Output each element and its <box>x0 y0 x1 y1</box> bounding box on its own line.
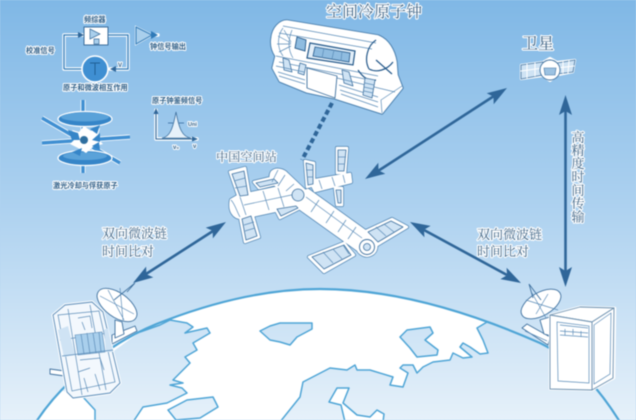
amplifier <box>136 27 152 44</box>
left ground station <box>50 282 143 398</box>
left building <box>53 302 120 398</box>
diagram: servo loop: 钟信号输出 <box>150 42 186 51</box>
atom microwave circle <box>82 56 108 82</box>
diagram: clock signal graph: Uni <box>188 122 197 128</box>
space station <box>230 148 407 272</box>
pump <box>295 37 306 51</box>
label: satellite: 卫星 <box>522 35 554 53</box>
right ocean <box>280 322 620 420</box>
diagram: clock signal graph <box>152 96 202 151</box>
end fan <box>277 28 293 58</box>
diagram: clock signal graph: ν <box>193 144 197 150</box>
diagram: servo loop: V <box>118 63 122 69</box>
satellite <box>521 58 575 81</box>
vacuum window <box>307 43 355 65</box>
arrow: satellite to right ground <box>559 95 572 287</box>
trapping arrows <box>68 125 100 156</box>
earth <box>36 289 620 420</box>
right dish <box>516 283 566 325</box>
server cabinet <box>550 307 615 390</box>
right cap curves <box>358 40 393 80</box>
arrow: station to left ground <box>133 222 226 283</box>
upper and right module lines <box>272 170 345 191</box>
left module lines <box>231 188 296 217</box>
panel grid lines <box>234 157 394 263</box>
dashed link <box>302 103 332 160</box>
label: space station: 中国空间站 <box>216 149 277 164</box>
body <box>540 60 560 80</box>
diagram: laser cooling <box>42 100 130 190</box>
ladder <box>363 78 375 98</box>
label: right microwave link: 双向微波链 <box>477 227 542 242</box>
clock silhouette <box>272 21 402 113</box>
laser label: 激光冷却与俘获原子 <box>53 181 118 190</box>
center block <box>307 68 337 98</box>
arrow: station to right ground <box>410 222 521 283</box>
laser beams <box>42 100 130 173</box>
loop labels: 频综器 <box>84 15 106 24</box>
bottom coil <box>58 150 112 166</box>
top coil <box>58 112 112 126</box>
atom cloud <box>70 126 103 153</box>
left ocean <box>60 320 210 420</box>
synthesizer box <box>84 27 108 45</box>
diagram: clock signal graph: ν₀ <box>173 145 179 151</box>
graph labels: 原子钟鉴频信号 <box>152 96 202 105</box>
platform lines <box>276 66 402 113</box>
diagonal module lines <box>306 197 362 239</box>
label: high precision time transfer: 间 <box>571 183 585 198</box>
right panel <box>557 60 575 74</box>
label: high precision time transfer: 时 <box>571 170 585 184</box>
station outer outline <box>230 148 407 272</box>
left building interior <box>75 332 105 355</box>
right dish base <box>522 324 550 345</box>
label: left microwave link: 双向微波链 <box>102 226 167 241</box>
station white fill <box>230 148 407 272</box>
label: high precision time transfer: 精 <box>571 142 585 158</box>
left coastline <box>72 320 210 420</box>
arrow: station to satellite <box>365 88 507 179</box>
diagram: servo loop: 原子和微波相互作用 <box>63 83 128 92</box>
graph axes <box>156 110 197 139</box>
label: high precision time transfer: 传 <box>571 196 585 211</box>
cold atom clock module <box>272 21 402 113</box>
resonance peak <box>162 112 191 138</box>
diagram: servo loop <box>26 15 186 92</box>
title: cold atom clock: 空间冷原子钟 <box>326 3 422 21</box>
solar panels <box>232 150 403 269</box>
label: high precision time transfer: 输 <box>571 210 585 224</box>
diagram: servo loop: 校准信号 <box>26 46 55 55</box>
supports <box>283 58 353 86</box>
peninsula <box>329 388 384 420</box>
right coastline <box>280 322 488 420</box>
lakes <box>168 323 438 420</box>
limb <box>36 289 620 420</box>
docking node <box>292 189 304 201</box>
label: high precision time transfer: 高 <box>571 129 585 145</box>
label: right microwave link: 时间比对 <box>477 244 529 259</box>
left panel <box>521 62 543 79</box>
loop lines <box>64 35 158 69</box>
earth land mass <box>36 289 620 420</box>
label: left microwave link: 时间比对 <box>102 244 154 259</box>
end port <box>360 240 374 254</box>
cylinder lines <box>276 26 378 80</box>
left dish <box>91 282 143 328</box>
left dish base <box>112 326 137 344</box>
right ground station <box>516 283 615 390</box>
left ledge <box>50 369 72 377</box>
label: high precision time transfer: 度 <box>571 155 585 171</box>
